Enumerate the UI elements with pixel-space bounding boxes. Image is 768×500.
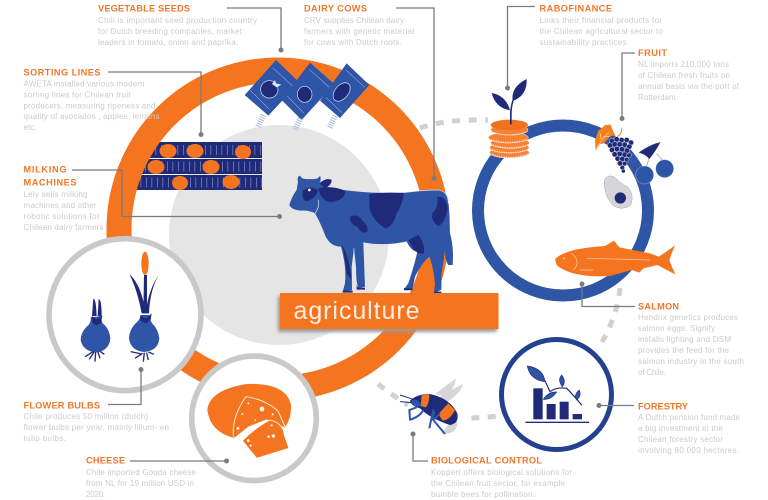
text: milking machines: MACHINES xyxy=(24,178,76,188)
forestry circle xyxy=(502,340,612,450)
cheese wedge xyxy=(242,420,289,458)
text: cheese: 2020. xyxy=(86,490,105,499)
text: salmon: of Chile. xyxy=(638,368,666,377)
leader: milking machines xyxy=(72,170,282,219)
text: flower bulbs: flower bulbs per year, mainly lilium- en xyxy=(24,423,169,432)
text: fruit: FRUIT xyxy=(638,48,667,58)
text: salmon: salmon industry in the south xyxy=(638,357,744,366)
text: milking machines xyxy=(24,164,104,232)
icon: coins and plant xyxy=(488,79,529,158)
leader: forestry xyxy=(596,403,634,408)
text: rabofinance: sustainability practices. xyxy=(540,38,629,47)
banner: agriculture: agriculture xyxy=(294,297,420,325)
text: flower bulbs: Chile produces 50 million (dutch) xyxy=(24,412,148,421)
icon: bumble bee xyxy=(400,378,463,434)
text: dairy cows: DAIRY COWS xyxy=(304,4,367,14)
text: milking machines: robotic solutions for xyxy=(24,212,100,221)
text: salmon: provides the feed for the xyxy=(638,346,730,355)
avocado xyxy=(604,176,632,208)
notch between wheel and wedge xyxy=(234,419,270,441)
text: salmon xyxy=(638,302,744,377)
seed packets xyxy=(245,60,369,129)
text: biological control: Koppert offers biological solutions for xyxy=(431,468,572,477)
text: biological control: bumble bees for pollination. xyxy=(431,490,535,499)
icon: fruit xyxy=(595,125,674,208)
text: sorting lines: AWETA installed various modern xyxy=(24,80,144,88)
text: sorting lines xyxy=(24,68,160,132)
banner: agriculture xyxy=(278,293,498,332)
leader: sorting lines xyxy=(108,72,204,137)
cow xyxy=(289,176,453,293)
text: forestry xyxy=(638,402,741,455)
flower bulbs circle xyxy=(49,239,201,391)
leader: fruit xyxy=(620,53,635,121)
text: salmon: salmon eggs, Signify xyxy=(638,324,715,333)
text: vegetable seeds: Chili is important seed production country xyxy=(98,16,257,25)
cherries xyxy=(636,142,674,184)
packet: onion seeds xyxy=(282,63,334,120)
text: flower bulbs: FLOWER BULBS xyxy=(24,400,100,410)
small bulb xyxy=(81,299,110,362)
text: fruit: of Chilean fresh fruits on xyxy=(638,71,730,80)
text: forestry: Chilean forestry sector xyxy=(638,435,723,444)
leader: flower bulbs xyxy=(108,367,144,404)
text: vegetable seeds: for Dutch breeding companies, market xyxy=(98,27,243,36)
dashed connector between the main ring and the other topics xyxy=(378,120,620,418)
leader: salmon xyxy=(580,282,635,306)
text: cheese xyxy=(86,456,197,499)
text: dairy cows: CRV supplies Chilean dairy xyxy=(304,16,404,25)
text: sorting lines: producers, measuring ripeness and xyxy=(24,102,156,110)
text: fruit: annual basis via the port of xyxy=(638,82,740,91)
blue ring xyxy=(478,126,648,296)
leader: cheese xyxy=(130,458,229,464)
text: fruit xyxy=(638,48,740,102)
text: salmon: installs lighting and DSM xyxy=(638,335,731,344)
text: forestry: involving 80.000 hectares. xyxy=(638,446,739,455)
text: sorting lines: quality of avocados , apples, lemons xyxy=(24,112,160,121)
grape stem xyxy=(617,128,622,137)
cheese circle xyxy=(192,356,316,481)
text: sorting lines: SORTING LINES xyxy=(24,68,100,78)
icon: bars and branch xyxy=(525,366,589,423)
text: vegetable seeds: VEGETABLE SEEDS xyxy=(98,4,190,14)
text: cheese: Chile imported Gouda cheese xyxy=(86,468,197,477)
text: dairy cows: for cows with Dutch roots. xyxy=(304,38,402,47)
text: dairy cows: farmers with genetic material xyxy=(304,27,414,36)
icon: salmon xyxy=(555,241,675,276)
leader: dairy cows xyxy=(396,8,436,181)
leader: vegetable seeds xyxy=(227,8,284,52)
text: forestry: FORESTRY xyxy=(638,402,688,412)
text: forestry: A Dutch pension fund made xyxy=(638,413,741,422)
packet: tomato seeds xyxy=(245,60,299,116)
text: flower bulbs: tulip bulbs. xyxy=(24,434,66,443)
text: fruit: NL imports 210.000 tons xyxy=(638,60,729,69)
text: rabofinance: RABOFINANCE xyxy=(540,4,612,14)
text: vegetable seeds: leaders in tomato, onion and paprika. xyxy=(98,38,238,47)
text: milking machines: Lely sells milking xyxy=(24,190,88,199)
cheese wheel xyxy=(207,384,291,438)
coin stack top xyxy=(491,120,528,130)
text: sorting lines: sorting lines for Chilean fruit xyxy=(24,90,131,100)
text: milking machines: MILKING xyxy=(24,164,66,174)
text: milking machines: Chilean dairy farmers xyxy=(24,223,104,232)
plant xyxy=(492,79,527,124)
text: dairy cows xyxy=(304,4,414,47)
text: salmon: SALMON xyxy=(638,302,679,312)
text: rabofinance: Links their financial products for xyxy=(540,16,662,25)
text: biological control: BIOLOGICAL CONTROL xyxy=(431,456,542,466)
text: salmon: Hendrix genetics produces xyxy=(638,313,738,322)
coin stack xyxy=(488,124,529,158)
grapes xyxy=(607,137,634,173)
text: biological control xyxy=(431,456,572,499)
text: milking machines: machines and other xyxy=(24,201,97,210)
packet: squash seeds xyxy=(320,63,369,118)
tall bulb with tulip xyxy=(129,252,159,362)
oranges on the belts xyxy=(148,144,251,190)
text: biological control: the Chilean fruit sector, for example xyxy=(431,479,566,488)
leader: biological control xyxy=(410,432,428,461)
text: vegetable seeds xyxy=(98,4,257,47)
text: cheese: CHEESE xyxy=(86,456,125,466)
grey background circle xyxy=(169,125,389,345)
text: fruit: Rotterdam. xyxy=(638,93,678,102)
text: cheese: from NL for 19 million USD in xyxy=(86,479,194,488)
text: sorting lines: etc. xyxy=(24,123,36,132)
text: rabofinance: the Chilean agricultural sector to xyxy=(540,27,664,36)
vine leaf xyxy=(595,125,615,151)
falling seeds xyxy=(258,115,335,129)
text: flower bulbs xyxy=(24,400,169,443)
sorting line conveyor belts xyxy=(130,142,262,190)
main orange ring xyxy=(119,70,437,388)
text: rabofinance xyxy=(540,4,664,47)
text: forestry: a big investment in the xyxy=(638,424,724,433)
leader: rabofinance xyxy=(505,6,535,90)
